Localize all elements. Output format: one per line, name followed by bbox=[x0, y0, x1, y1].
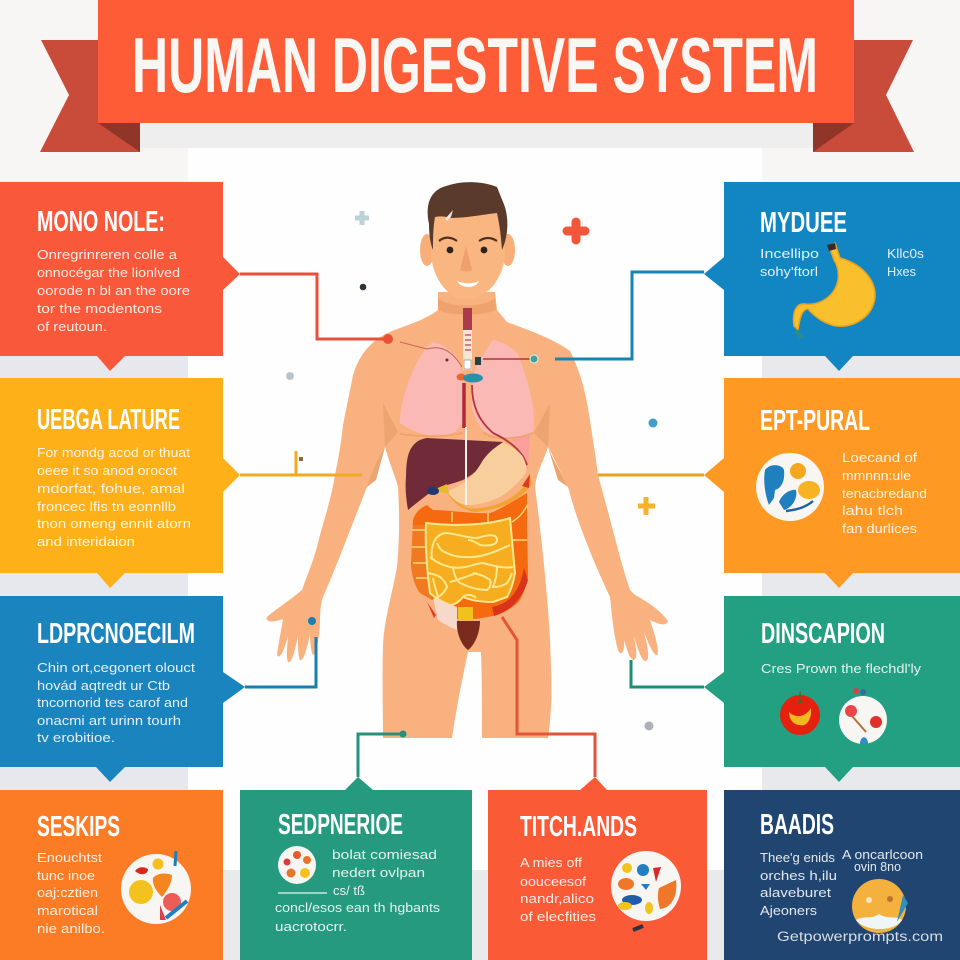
body text: Ajeoners bbox=[760, 903, 818, 918]
body text bbox=[760, 847, 923, 918]
body text: fan durlices bbox=[842, 521, 918, 536]
heading: SESKIPS bbox=[37, 811, 120, 843]
body text: bolat comiesad bbox=[332, 847, 437, 862]
heading: TITCH.ANDS bbox=[520, 811, 637, 843]
body text: A mies off bbox=[520, 855, 582, 870]
body text: tv erobitioe. bbox=[37, 730, 115, 745]
panel: bottom red bbox=[488, 777, 707, 960]
arm shadows bbox=[367, 403, 568, 487]
liver bbox=[406, 438, 503, 510]
body text: tnon omeng ennit atorn bbox=[37, 516, 191, 531]
body text: Chin ort,cegonert olouct bbox=[37, 660, 195, 675]
body text: of reutoun. bbox=[37, 319, 107, 334]
heading: MYDUEE bbox=[760, 207, 847, 239]
body text: Onregrinreren colle a bbox=[37, 247, 178, 262]
body text: Enouchtst bbox=[37, 850, 102, 865]
divider with dot bbox=[278, 892, 327, 894]
body text: concl/esos ean th hgbants bbox=[275, 900, 441, 915]
heading: UEBGA LATURE bbox=[37, 404, 180, 436]
heading: DINSCAPION bbox=[761, 618, 885, 650]
connector: orange right bbox=[598, 474, 704, 476]
body text: oeee it so anod orocot bbox=[37, 463, 177, 478]
body text bbox=[275, 847, 441, 934]
icon: organ plate bbox=[756, 453, 824, 521]
body text: ovin 8no bbox=[854, 859, 901, 874]
body text: Incellipo bbox=[760, 246, 819, 261]
body text: nedert ovlpan bbox=[332, 865, 425, 880]
connector: blue lower left bbox=[245, 617, 316, 687]
body text: tncornorid tes carof and bbox=[37, 695, 188, 710]
watermark: Getpowerprompts.com bbox=[777, 929, 943, 944]
body text: oouceesof bbox=[520, 874, 586, 889]
body text bbox=[37, 247, 190, 334]
body text: Loecand of bbox=[842, 450, 917, 465]
connector: green bottom bbox=[358, 730, 406, 777]
body text: cs/ tß bbox=[333, 883, 365, 898]
connector: green lower right bbox=[631, 660, 704, 687]
body text: Hxes bbox=[887, 264, 916, 279]
body text: orches h,ilu bbox=[760, 868, 837, 883]
connector: red top left bbox=[240, 274, 393, 344]
heading: SEDPNERIOE bbox=[278, 809, 403, 841]
neck shadow bbox=[438, 298, 496, 314]
body text: sohy'ftorl bbox=[760, 264, 818, 279]
small intestine bbox=[426, 518, 515, 605]
body text: tor the modentons bbox=[37, 301, 163, 316]
panel: lower left blue bbox=[0, 596, 245, 782]
body text: uacrotocrr. bbox=[275, 919, 347, 934]
panel: top left red bbox=[0, 182, 240, 371]
large intestine bbox=[411, 493, 528, 619]
connector: yellow left bbox=[240, 451, 362, 475]
right ribbon tail bbox=[813, 40, 914, 152]
panel: bottom orange bbox=[0, 790, 223, 960]
panel: lower right green bbox=[704, 596, 960, 782]
body text bbox=[37, 445, 191, 549]
panel: middle left yellow bbox=[0, 378, 240, 588]
body silhouette bbox=[267, 292, 668, 738]
title banner bbox=[40, 0, 914, 152]
chest crease bbox=[400, 433, 533, 438]
body text: For mondg acod or thuat bbox=[37, 445, 190, 460]
body text: froncec lfis tn eonnllb bbox=[37, 499, 176, 514]
body text: tenacbredand bbox=[842, 486, 927, 501]
decoration: plus markers and dots bbox=[286, 211, 658, 730]
icon: food plate bbox=[611, 851, 681, 930]
heading: MONO NOLE: bbox=[37, 206, 165, 238]
lungs bbox=[400, 340, 534, 438]
stomach bbox=[447, 443, 526, 505]
body text: alaveburet bbox=[760, 885, 831, 900]
center white line bbox=[465, 427, 467, 505]
icon: tomato bbox=[780, 690, 820, 735]
banner background bbox=[98, 0, 854, 123]
esophagus and trachea bbox=[400, 308, 527, 465]
rectum and appendix bbox=[427, 598, 480, 650]
icon: white plate bbox=[839, 688, 887, 744]
body text: hovád aqtredt ur Ctb bbox=[37, 678, 170, 693]
body text bbox=[760, 246, 925, 279]
human figure bbox=[267, 182, 668, 738]
body text: mmnnn:ule bbox=[842, 468, 911, 483]
body text: marotical bbox=[37, 903, 98, 918]
left ribbon tail bbox=[40, 40, 140, 152]
connector: red bottom bbox=[502, 617, 595, 777]
body text: onnocégar the lionlved bbox=[37, 265, 180, 280]
lower chest pink bbox=[510, 433, 530, 472]
body text: tunc inoe bbox=[37, 868, 95, 883]
body text: onacmi art urinn tourh bbox=[37, 713, 181, 728]
icon: stomach bbox=[793, 243, 875, 338]
body text: Thee'g enids bbox=[760, 850, 835, 865]
body text: oorode n bl an the oore bbox=[37, 283, 190, 298]
body text: lahu tlch bbox=[842, 503, 903, 518]
panel: middle right orange bbox=[704, 378, 960, 588]
icon: food plate bbox=[121, 851, 191, 924]
heading: LDPRCNOECILM bbox=[37, 618, 195, 650]
body text: nandr,alico bbox=[520, 891, 594, 906]
heading: BAADIS bbox=[760, 809, 834, 841]
body text bbox=[842, 450, 927, 536]
body text: and interidaion bbox=[37, 534, 135, 549]
heading: EPT-PURAL bbox=[760, 405, 870, 437]
body text: of elecfities bbox=[520, 909, 597, 924]
body text: Cres Prown the flechdl'ly bbox=[761, 661, 922, 676]
panel: top right blue bbox=[704, 182, 960, 371]
body text: mdorfat, fohue, amal bbox=[37, 481, 185, 496]
icon: small food plate bbox=[278, 846, 316, 884]
connector: blue top right bbox=[483, 272, 704, 363]
panel: bottom green bbox=[240, 777, 472, 960]
body text bbox=[37, 660, 195, 745]
body text bbox=[37, 850, 105, 936]
body text: oaj:cztien bbox=[37, 885, 98, 900]
body text bbox=[520, 855, 597, 924]
icon: sun face bbox=[852, 879, 908, 933]
head bbox=[420, 182, 515, 299]
body text: nie anilbo. bbox=[37, 921, 105, 936]
body text: Kllc0s bbox=[887, 246, 925, 261]
panel: bottom navy bbox=[724, 790, 960, 960]
body text: A oncarlcoon bbox=[842, 847, 923, 862]
